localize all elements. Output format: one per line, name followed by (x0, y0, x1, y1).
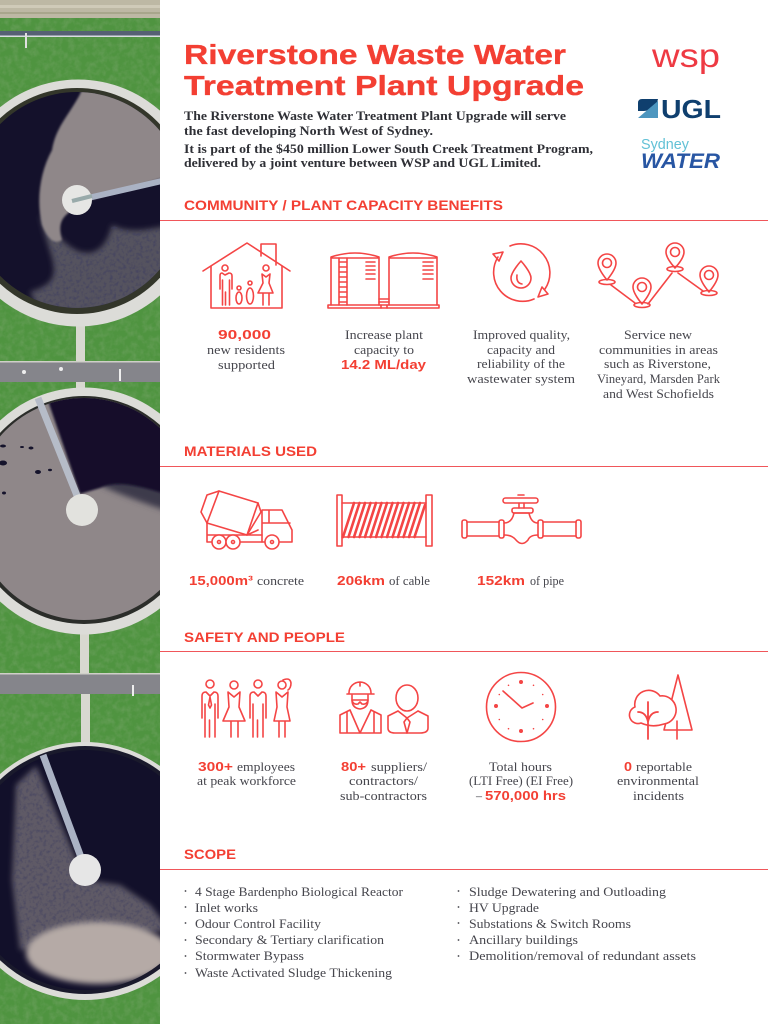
caption: plant capacity (341, 328, 427, 372)
title: Riverstone Waste Water (184, 39, 566, 70)
caption: service new communities: Vineyard, Marsden Park (597, 372, 721, 386)
caption: improved quality: wastewater system (467, 372, 575, 386)
intro text block: the fast developing North West of Sydney. (184, 124, 433, 138)
caption: total hours: Total hours (489, 760, 552, 774)
intro text block: The Riverstone Waste Water Treatment Plant Upgrade will serve (184, 109, 566, 123)
caption: service new communities (597, 328, 721, 401)
caption: plant capacity: 14.2 ML/day (341, 357, 427, 372)
list: scope right column: Demolition/removal of redundant assets (469, 949, 696, 963)
intro text block: It is part of the $450 million Lower South Creek Treatment Program, (184, 142, 593, 156)
intro text block: delivered by a joint venture between WSP and UGL Limited. (184, 156, 541, 170)
icon: cable spool (337, 495, 432, 546)
caption: service new communities: communities in areas (599, 343, 718, 357)
icon: house and family (203, 243, 290, 308)
tank 1 (0, 80, 160, 326)
caption: environmental incidents: reportable (636, 760, 692, 774)
caption: suppliers: 80+ (341, 759, 366, 774)
list: scope left column: 4 Stage Bardenpho Biological Reactor (195, 885, 404, 899)
caption: service new communities: such as Riverstone, (604, 357, 711, 371)
icon: storage tanks (328, 253, 439, 308)
panel: scope (160, 847, 768, 980)
caption: pipe: 152km (477, 573, 525, 588)
tank 3 (0, 742, 160, 1000)
icon: pipe valve (462, 495, 581, 544)
icon: clock (486, 672, 556, 742)
caption: suppliers: sub-contractors (340, 789, 427, 803)
list: scope right column (458, 885, 696, 963)
icon: four employees (202, 679, 291, 737)
caption: employees: at peak workforce (197, 774, 296, 788)
logo: Sydney Water: WATER (641, 150, 721, 173)
caption: cable: of cable (389, 574, 430, 588)
caption: 90,000 new residents (207, 327, 285, 372)
caption: environmental incidents: environmental (617, 774, 700, 788)
logo: Sydney Water (641, 137, 721, 173)
icon: trees (629, 675, 692, 739)
caption: suppliers: suppliers/ (371, 760, 428, 774)
caption: pipe: of pipe (530, 574, 564, 588)
caption: improved quality: reliability of the (477, 357, 565, 371)
caption: improved quality: Improved quality, (473, 328, 570, 342)
logo: WSP: wsp (651, 37, 720, 74)
caption: cable: 206km (337, 573, 385, 588)
intro text block (184, 109, 593, 170)
caption: improved quality: capacity and (487, 343, 556, 357)
caption: total hours (469, 760, 573, 803)
heading: community benefits: COMMUNITY / PLANT CAPACITY BENEFITS (184, 198, 503, 213)
caption: total hours: (LTI Free) (EI Free) (469, 774, 573, 788)
caption: plant capacity: capacity to (354, 343, 414, 357)
logo: UGL: UGL (661, 94, 721, 124)
title (184, 39, 584, 101)
list: scope right column: Substations & Switch Rooms (469, 917, 631, 931)
caption: concrete (189, 573, 305, 588)
caption: environmental incidents: 0 (624, 759, 632, 774)
caption: total hours: – (475, 789, 483, 803)
panel: materials used (160, 444, 768, 588)
list: scope left column (185, 885, 404, 980)
caption: concrete: concrete (257, 574, 305, 588)
panel: community benefits (160, 198, 768, 401)
caption: concrete: 15,000m³ (189, 573, 254, 588)
caption: total hours: 570,000 hrs (485, 788, 566, 803)
list: scope right column: Ancillary buildings (469, 933, 578, 947)
caption: 90,000 new residents: 90,000 (218, 327, 271, 342)
heading: scope: SCOPE (184, 847, 236, 862)
caption: improved quality (467, 328, 575, 386)
caption: pipe (477, 573, 564, 588)
tank 2 (0, 388, 160, 634)
caption: employees: 300+ (198, 759, 233, 774)
list: scope left column: Waste Activated Sludge Thickening (195, 966, 393, 980)
logo: Sydney Water: Sydney (641, 137, 690, 153)
caption: plant capacity: Increase plant (345, 328, 424, 342)
caption: 90,000 new residents: new residents (207, 343, 285, 357)
caption: environmental incidents (617, 759, 700, 803)
icon: concrete mixer truck (201, 491, 292, 549)
caption: employees: employees (237, 760, 295, 774)
caption: environmental incidents: incidents (633, 789, 684, 803)
heading: safety and people: SAFETY AND PEOPLE (184, 630, 345, 645)
caption: suppliers: contractors/ (349, 774, 419, 788)
icon: worker and businessman (340, 682, 428, 733)
caption: service new communities: Service new (624, 328, 692, 342)
icon: location pins (598, 243, 718, 308)
logo: UGL (638, 94, 721, 124)
list: scope right column: Sludge Dewatering and Outloading (469, 885, 667, 899)
title: Treatment Plant Upgrade (184, 70, 584, 101)
caption: 90,000 new residents: supported (218, 358, 276, 372)
caption: service new communities: and West Schofields (603, 387, 714, 401)
icon: water drop cycle (493, 244, 550, 301)
caption: suppliers (340, 759, 428, 803)
list: scope left column: Secondary & Tertiary clarification (195, 933, 385, 947)
aerial photo strip of treatment tanks (0, 0, 160, 1024)
road and paths (76, 326, 85, 361)
panel: safety and people (160, 630, 768, 803)
list: scope right column: HV Upgrade (469, 901, 539, 915)
list: scope left column: Odour Control Facility (195, 917, 322, 931)
list: scope left column: Stormwater Bypass (195, 949, 304, 963)
caption: cable (337, 573, 430, 588)
heading: materials used: MATERIALS USED (184, 444, 317, 459)
caption: employees (197, 759, 296, 788)
list: scope left column: Inlet works (195, 901, 258, 915)
